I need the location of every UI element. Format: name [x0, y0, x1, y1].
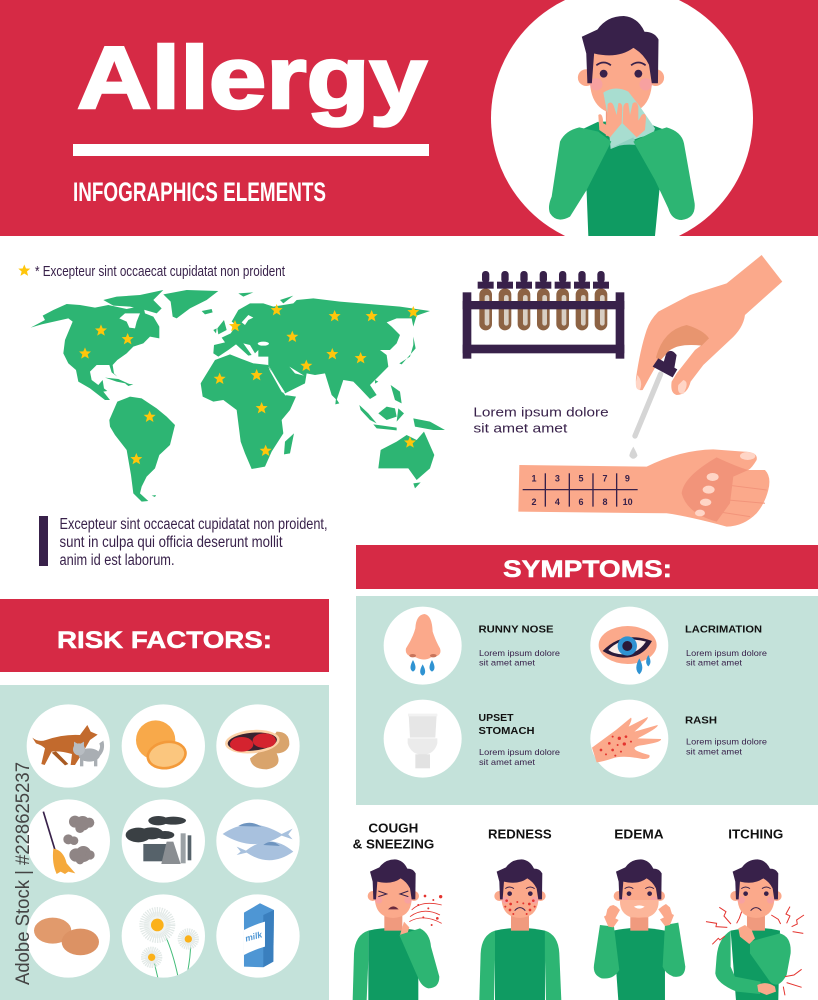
map stars	[79, 304, 419, 464]
caption	[473, 405, 609, 436]
heading: risk factors: RISK FACTORS:	[57, 627, 272, 654]
label: redness: REDNESS	[488, 826, 552, 841]
heading: risk factors	[0, 599, 329, 672]
map: eurasia, africa, oceania	[201, 292, 445, 488]
icon: eggs	[27, 894, 110, 978]
icon: daisies	[122, 894, 205, 978]
symptom: upset stomach: sit amet amet	[479, 757, 536, 767]
symptom figures	[353, 821, 804, 1000]
label: cough and sneezing: & SNEEZING	[353, 837, 434, 852]
icon: hand rash	[590, 700, 668, 778]
figure: cough and sneezing	[353, 859, 442, 1000]
symptom: lacrimation: Lorem ipsum dolore	[686, 648, 767, 658]
icon: forearm with test grid: 10	[623, 497, 633, 507]
icon: orange	[122, 704, 205, 788]
icon: runny nose	[384, 607, 462, 685]
icon: dust and broom	[27, 799, 110, 883]
heading: symptoms: SYMPTOMS:	[503, 556, 672, 583]
icon: milk carton	[216, 894, 300, 978]
icon: forearm with test grid: 7	[602, 473, 607, 483]
map note	[39, 516, 328, 569]
icon: forearm with test grid: 1	[531, 473, 536, 483]
icon: forearm with test grid: 5	[578, 473, 583, 483]
icon: forearm with test grid: 6	[578, 497, 583, 507]
icon: forearm with test grid: 8	[602, 497, 607, 507]
allergy test illustration	[463, 255, 782, 527]
panel: symptoms	[356, 545, 818, 805]
label: cough and sneezing	[353, 821, 434, 852]
header banner	[0, 0, 818, 236]
figure: itching	[706, 859, 804, 1000]
icon: toilet	[384, 700, 462, 778]
icon: forearm with test grid: 2	[531, 497, 536, 507]
map legend	[18, 263, 286, 280]
icon: forearm with test grid	[518, 449, 769, 527]
symptom: runny nose: sit amet amet	[479, 658, 536, 668]
icon: watery eye	[590, 607, 668, 685]
symptom: upset stomach: STOMACH	[478, 725, 534, 737]
symptom: upset stomach: Lorem ipsum dolore	[479, 747, 560, 757]
legend text: * Excepteur sint occaecat cupidatat non proident	[35, 263, 286, 280]
map note: anim id est laborum.	[60, 552, 174, 569]
label: cough and sneezing: COUGH	[368, 821, 418, 836]
symptom: rash: RASH	[685, 715, 717, 727]
symptom: runny nose: Lorem ipsum dolore	[479, 648, 560, 658]
map: americas	[31, 290, 218, 502]
icon: forearm with test grid: 9	[625, 473, 630, 483]
title underline	[73, 144, 429, 156]
subtitle: INFOGRAPHICS ELEMENTS	[73, 177, 326, 207]
icon: fish	[216, 799, 300, 883]
heading: symptoms	[356, 545, 818, 589]
icon: forearm with test grid: 3	[555, 473, 560, 483]
icon: factory pollution	[122, 799, 205, 883]
symptom: lacrimation: sit amet amet	[686, 658, 743, 668]
symptom: rash: sit amet amet	[686, 746, 743, 756]
figure: edema	[594, 859, 685, 1000]
title: Allergy	[77, 28, 427, 127]
symptom: lacrimation: LACRIMATION	[685, 624, 762, 636]
stock id watermark: Adobe Stock | #228625237	[12, 762, 34, 985]
icon: dropper in hand	[629, 255, 782, 459]
symptom: rash: Lorem ipsum dolore	[686, 737, 767, 747]
symptom: runny nose: RUNNY NOSE	[478, 624, 554, 636]
symptom: upset stomach	[478, 712, 560, 767]
header portrait: man with tissue	[491, 0, 753, 249]
icon: legend star	[18, 265, 30, 276]
icon: test tube rack	[463, 271, 624, 359]
label: edema: EDEMA	[614, 826, 664, 841]
map note: sunt in culpa qui officia deserunt mollit	[60, 534, 283, 551]
icon: milk carton: milk	[244, 929, 264, 944]
symptom: upset stomach: UPSET	[478, 712, 514, 724]
icon: peanut	[216, 704, 300, 788]
figure: redness	[479, 859, 561, 1000]
label: itching: ITCHING	[728, 826, 783, 841]
map note: Excepteur sint occaecat cupidatat non proident,	[60, 516, 328, 533]
icon: forearm with test grid: 4	[555, 497, 560, 507]
symptom: runny nose	[478, 624, 560, 668]
symptom: lacrimation	[685, 624, 767, 668]
caption: sit amet amet	[473, 421, 568, 436]
panel: risk factors	[0, 599, 329, 1000]
caption: Lorem ipsum dolore	[473, 405, 609, 420]
world map	[31, 290, 445, 502]
icon: dog and cat	[27, 704, 110, 788]
symptom: rash	[685, 715, 767, 756]
